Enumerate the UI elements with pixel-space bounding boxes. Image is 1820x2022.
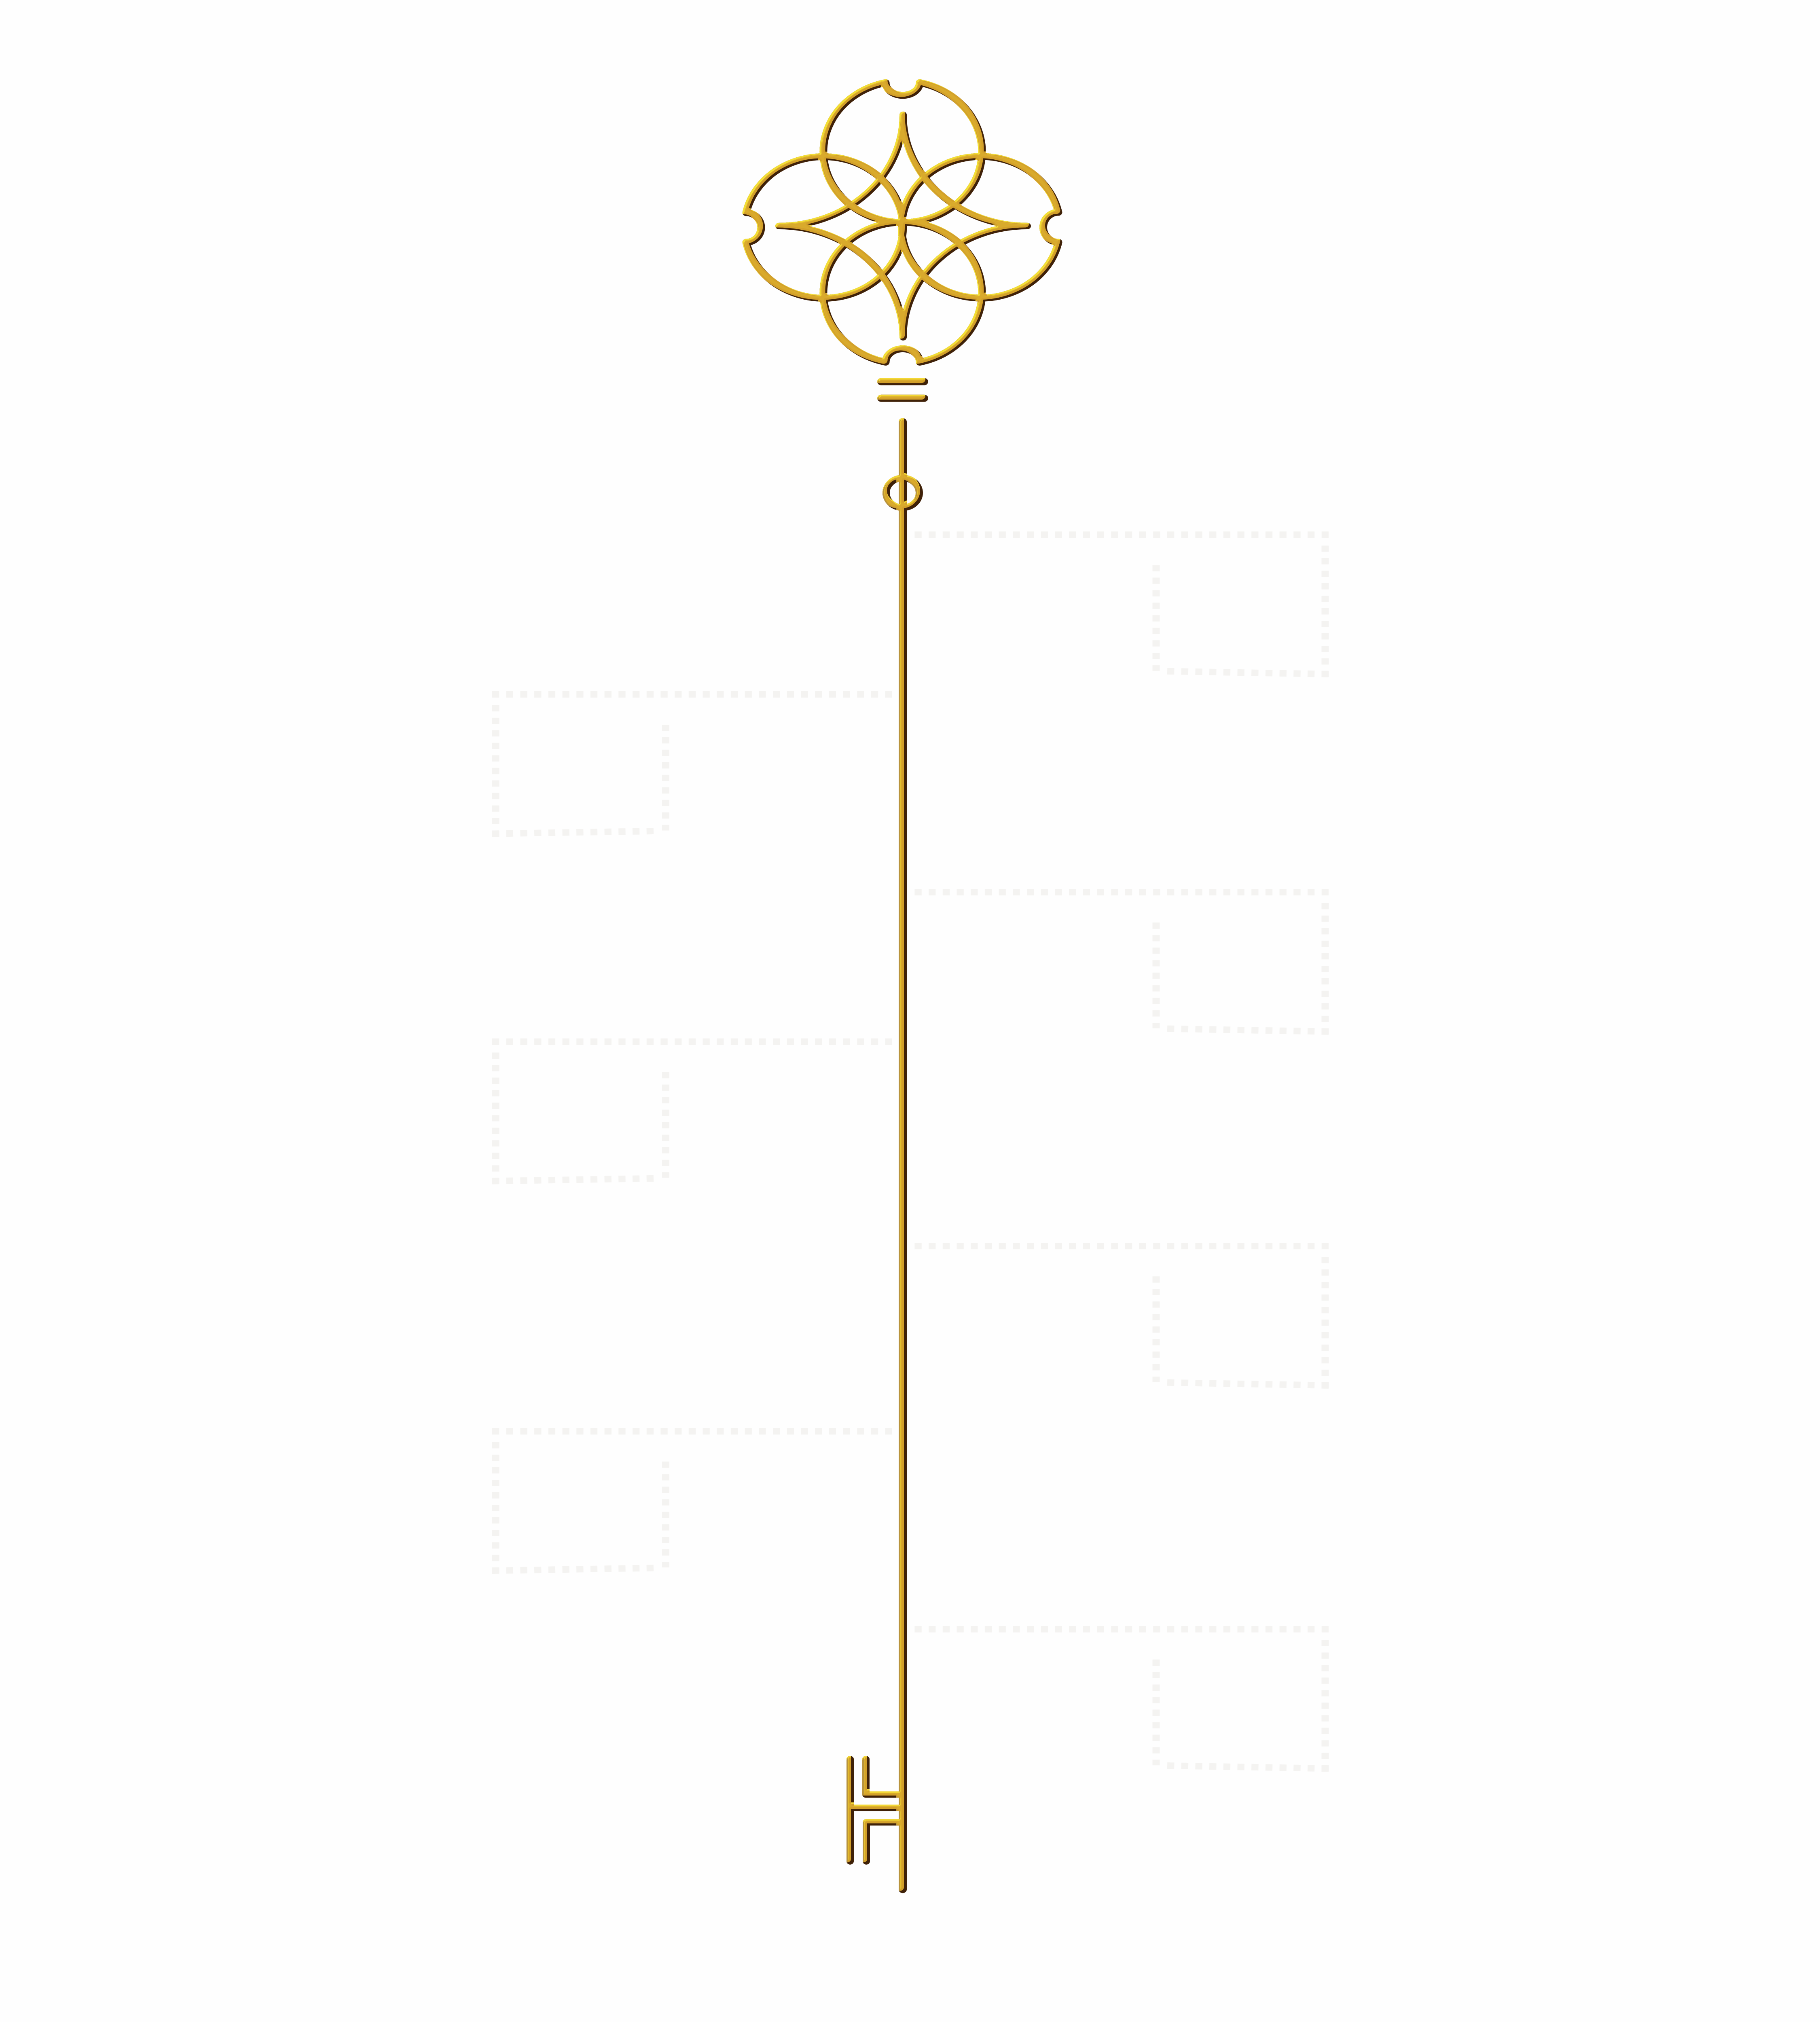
left notched circle	[746, 157, 903, 298]
shaft	[899, 422, 907, 1889]
shaft ring	[886, 478, 919, 508]
key bit teeth	[850, 1759, 903, 1861]
panel: right dotted frame 1	[914, 535, 1329, 677]
panel: right dotted frame 2	[914, 892, 1329, 1035]
top notched circle	[823, 82, 982, 222]
key head: four circles and star	[746, 82, 1058, 362]
bottom notched circle	[823, 222, 982, 362]
key shaft and bit	[850, 382, 924, 1889]
four-point star	[779, 115, 1027, 337]
panel: left dotted frame 3	[492, 1431, 895, 1574]
right notched circle	[902, 157, 1058, 298]
panel: right dotted frame 4	[914, 1629, 1329, 1772]
panel: right dotted frame 3	[914, 1246, 1329, 1389]
collar bars	[881, 382, 924, 398]
panel: left dotted frame 1	[492, 694, 895, 837]
panel: left dotted frame 2	[492, 1042, 895, 1184]
golden key	[746, 82, 1058, 1889]
